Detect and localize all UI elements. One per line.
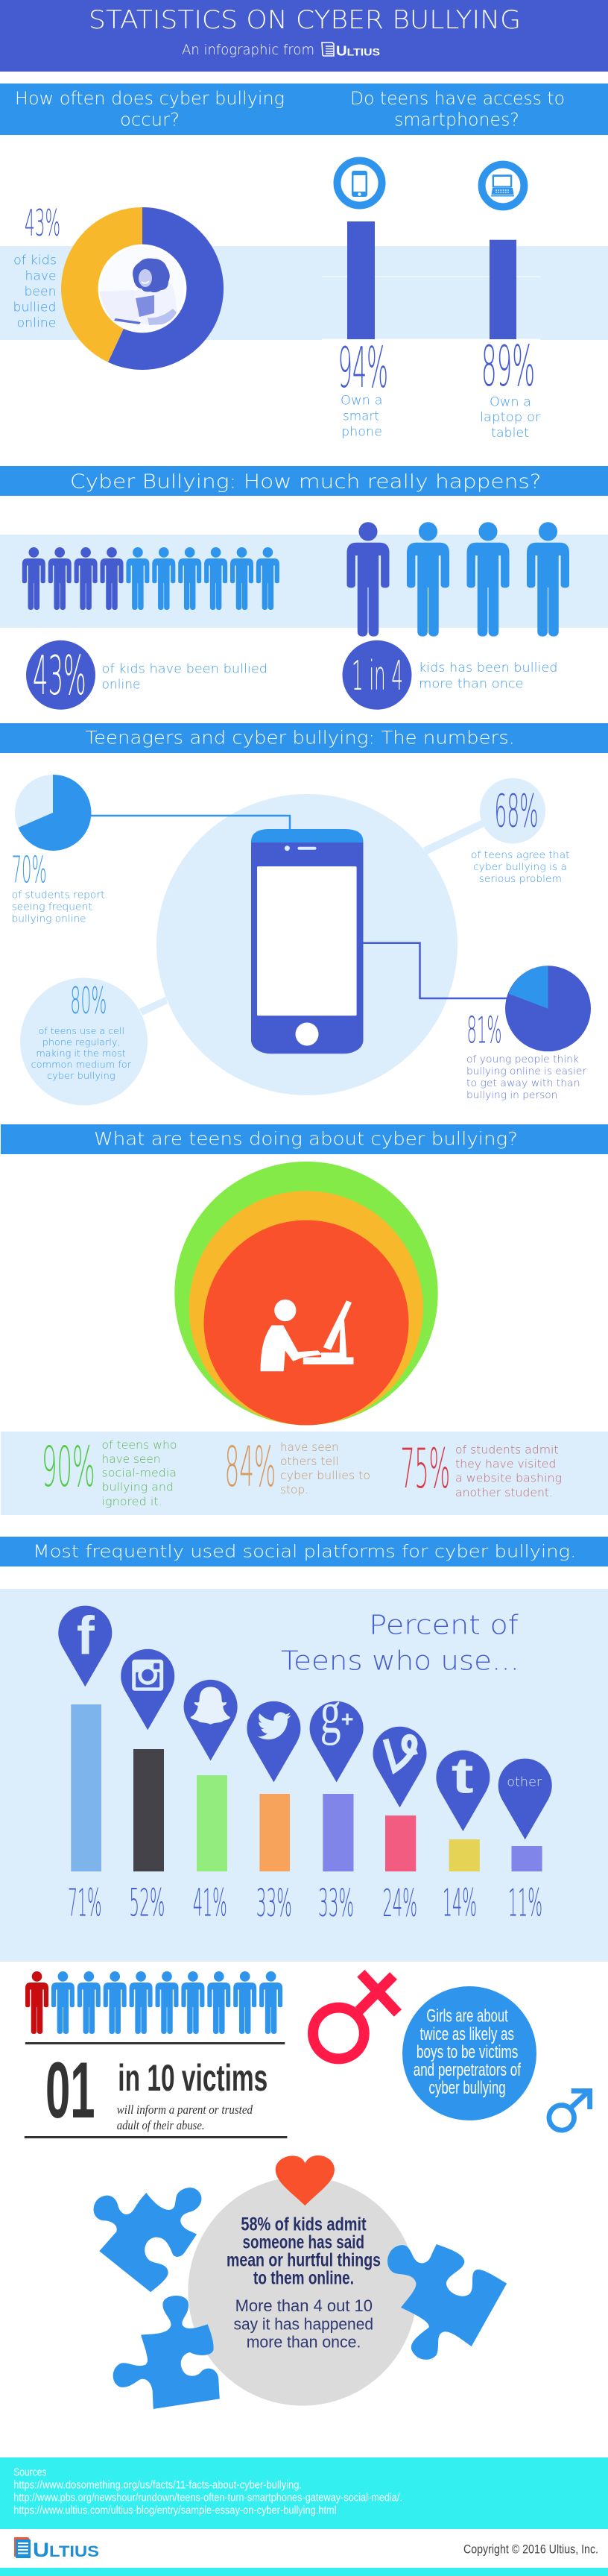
caption: visited a website: of students admit [455, 1443, 559, 1457]
caption: cell phone: of teens use a cell [39, 1025, 124, 1036]
caption: visited a website: another student. [455, 1486, 553, 1499]
icon: twitter pin [247, 1701, 300, 1782]
connector to 68% circle [423, 820, 485, 854]
caption: own a smart phone: smart [343, 409, 379, 424]
chart title: Teens who use... [281, 1646, 519, 1676]
photo: girl with laptop [98, 245, 186, 333]
caption: frequent bullying: bullying online [12, 913, 86, 925]
section band: the numbers: Teenagers and cyber bullying: The numbers. [86, 728, 515, 749]
caption: serious problem: of teens agree that [471, 849, 570, 861]
connector: phone to pie [364, 943, 508, 998]
section band: the numbers [0, 723, 608, 753]
callout: girls vs boys: cyber bullying [429, 2078, 506, 2098]
icon: instagram pin [121, 1649, 174, 1730]
heading: how often: How often does cyber bullying [15, 88, 285, 109]
section band: social platforms [0, 1537, 608, 1566]
icon: google plus pin: g [320, 1681, 341, 1746]
panel: sources: https://www.dosomething.org/us/facts/11-facts-about-cyber-bullying. [13, 2479, 302, 2492]
section band: two questions [0, 84, 608, 135]
subtitle: An infographic from [182, 42, 314, 58]
caption: ignored: bullying and [101, 1481, 174, 1494]
caption: own a smart phone: phone [341, 425, 382, 440]
panel: sources: http://www.pbs.org/newshour/rundown/teens-often-turn-smartphones-gateway-social-media/. [13, 2492, 402, 2504]
caption: told bullies to stop: have seen [280, 1440, 339, 1454]
panel: what teens do stats: 75% [401, 1437, 450, 1501]
text: more than 4 out of 10: say it has happened [234, 2314, 373, 2333]
text: 58% of kids: to them online. [253, 2267, 354, 2288]
panel: what teens do stats: 84% [225, 1435, 276, 1499]
donut caption: been [24, 285, 57, 300]
caption: visited a website: a website bashing [455, 1472, 562, 1485]
pictogram: 1 in 10 victims [25, 1971, 282, 2034]
icon: facebook pin: f [77, 1607, 95, 1666]
icon: google plus pin: + [341, 1707, 354, 1732]
chart title: Percent of [369, 1610, 519, 1640]
icon: smartphone in ring [337, 161, 381, 206]
percent labels: 24% [383, 1882, 417, 1926]
pie chart: 70% [15, 775, 91, 851]
donut caption: have [25, 268, 57, 283]
caption: easier online: of young people think [466, 1054, 579, 1065]
text: 80% [70, 980, 107, 1022]
connector: pie to phone [91, 816, 290, 829]
caption: own a laptop or tablet: laptop or [480, 410, 541, 425]
heading: smartphones: smartphones? [394, 109, 519, 130]
caption: own a laptop or tablet: tablet [491, 426, 529, 441]
icon: other pin [498, 1759, 552, 1839]
caption: cell phone: common medium for [31, 1059, 132, 1070]
icon: tumblr pin: t [452, 1748, 474, 1804]
donut caption: online [16, 316, 57, 331]
callout: girls vs boys: twice as likely as [420, 2024, 514, 2044]
icon: large smartphone [251, 829, 364, 1054]
caption: inform an adult: will inform a parent or trusted [117, 2103, 253, 2117]
caption: ignored: social-media [101, 1467, 177, 1480]
light band behind donut and bars [0, 246, 608, 340]
connector to 80% circle [139, 997, 168, 1015]
percent labels: 71% [68, 1882, 101, 1926]
caption: told bullies to stop: stop. [280, 1483, 308, 1496]
circle: 68% [480, 778, 545, 844]
caption: inform an adult: adult of their abuse. [117, 2118, 204, 2132]
icon: puzzle piece top left [94, 2188, 201, 2292]
logo: Ultius white: ULTIUS [336, 43, 380, 58]
pie chart: 81% [505, 966, 591, 1051]
caption: ignored: of teens who [101, 1438, 177, 1452]
caption: frequent bullying: of students report [12, 889, 105, 901]
stat: 01 in 10 victims [45, 2045, 267, 2135]
logo: Ultius white [322, 42, 380, 58]
section band: how much really happens [0, 466, 608, 496]
percent labels: 41% [193, 1882, 227, 1926]
text: more than 4 out of 10: more than once. [247, 2332, 361, 2351]
section band: how much really happens: Cyber Bullying: How much really happens? [70, 470, 541, 493]
donut caption: of kids [13, 253, 57, 268]
circle: 80% [20, 978, 148, 1105]
icon: tumblr pin [436, 1748, 490, 1831]
caption: told bullies to stop: cyber bullies to [280, 1469, 370, 1482]
bar chart [71, 1704, 542, 1871]
logo: Ultius footer: ULTIUS [33, 2539, 99, 2561]
nested circles with icon [174, 1162, 438, 1426]
pictogram: 10 kids, 4 highlighted [22, 547, 279, 610]
icon: female symbol [313, 1974, 398, 2059]
caption: own a laptop or tablet: Own a [490, 394, 531, 409]
icon: laptop in ring [482, 165, 524, 207]
icon: other pin: other [507, 1775, 542, 1789]
icon: facebook pin [58, 1606, 112, 1687]
stat circle: 1 in 4: 1 in 4 [352, 652, 403, 699]
callout: girls vs boys [402, 1986, 536, 2120]
panel: social platform chart [0, 1589, 608, 1962]
stat: 01 in 10 victims: in 10 victims [118, 2057, 267, 2099]
caption: serious problem: serious problem [479, 873, 562, 885]
bar: laptop 89% [490, 240, 516, 339]
text: 58% of kids: 58% of kids admit [241, 2214, 367, 2235]
icon: google plus pin [310, 1681, 364, 1782]
panel: sources [0, 2457, 608, 2529]
text: 58% of kids: someone has said [243, 2232, 364, 2252]
percent labels: 52% [129, 1882, 165, 1926]
caption: ignored: have seen [101, 1452, 161, 1466]
icon: puzzle piece right [387, 2244, 507, 2360]
caption: cell phone: phone regularly, [42, 1036, 120, 1048]
stat circle: 43%: 43% [33, 644, 86, 707]
caption: serious problem: cyber bullying is a [473, 861, 567, 873]
section band: social platforms: Most frequently used social platforms for cyber bullying. [33, 1543, 576, 1562]
panel: social platform chart: 11% [508, 1882, 542, 1926]
callout: girls vs boys: and perpetrators of [414, 2060, 521, 2080]
icon: person at computer [261, 1300, 353, 1371]
logo: Ultius footer [14, 2537, 99, 2561]
bottom bar [0, 2568, 608, 2576]
donut chart: 43% [61, 207, 224, 370]
text: 58% of kids: mean or hurtful things [227, 2249, 381, 2270]
text: 68% [495, 784, 538, 837]
caption: cell phone: cyber bullying [47, 1070, 115, 1081]
caption: kids bullied online: online [101, 677, 140, 692]
grey circle [188, 2176, 417, 2406]
icon: heart [276, 2155, 335, 2205]
caption: own a smart phone: Own a [341, 394, 383, 409]
stat: 01 in 10 victims: 01 [45, 2045, 95, 2135]
bar: smartphone 94% [347, 221, 375, 339]
text: 43% [25, 202, 60, 245]
caption: frequent bullying: seeing frequent [12, 901, 92, 913]
panel: sources: Sources [13, 2466, 46, 2479]
text: 94% [338, 335, 388, 400]
caption: easier online: bullying in person [466, 1089, 557, 1101]
panel: what teens do stats: 90% [42, 1435, 95, 1499]
caption: easier online: to get away with than [466, 1077, 580, 1089]
callout: girls vs boys: boys to be victims [417, 2042, 518, 2062]
light band behind people [0, 535, 608, 628]
large background circle [156, 794, 457, 1095]
pictogram: 4 kids, 1 highlighted [347, 522, 569, 637]
donut caption: bullied [13, 300, 57, 315]
text: 81% [466, 1010, 502, 1052]
heading: how often: occur? [120, 109, 180, 130]
callout: girls vs boys: Girls are about [426, 2006, 508, 2027]
section band: what are teens doing: What are teens doing about cyber bullying? [94, 1129, 518, 1150]
caption: told bullies to stop: others tell [280, 1455, 339, 1468]
section band: what are teens doing [1, 1124, 608, 1154]
caption: kids bullied online: of kids have been bullied [101, 661, 267, 676]
caption: bullied more than once: kids has been bullied [419, 661, 557, 676]
stat circle: 1 in 4 [343, 640, 411, 710]
text: 89% [481, 333, 535, 399]
title: STATISTICS ON CYBER BULLYING [89, 5, 521, 35]
text: more than 4 out of 10: More than 4 out 10 [235, 2296, 373, 2315]
stat circle: 43% [26, 640, 95, 710]
icon: vine pin [373, 1727, 426, 1807]
percent labels: 14% [443, 1882, 477, 1926]
caption: cell phone: making it the most [36, 1048, 126, 1059]
panel: sources: https://www.ultius.com/ultius-blog/entry/sample-essay-on-cyber-bullying.html [13, 2504, 337, 2517]
caption: easier online: bullying online is easier [466, 1065, 586, 1077]
caption: visited a website: they have visited [455, 1458, 556, 1471]
icon: puzzle piece bottom left [113, 2296, 220, 2409]
caption: ignored: ignored it. [101, 1495, 162, 1508]
text: 70% [12, 848, 47, 891]
caption: bullied more than once: more than once [419, 676, 524, 691]
icon: male symbol [549, 2091, 590, 2130]
panel: what teens do stats [1, 1432, 608, 1515]
percent labels: 33% [318, 1882, 354, 1926]
icon: snapchat pin [184, 1680, 238, 1761]
percent labels: 33% [256, 1882, 292, 1926]
percent labels [68, 1882, 542, 1926]
header banner [0, 0, 608, 72]
heading: smartphones: Do teens have access to [350, 88, 565, 109]
